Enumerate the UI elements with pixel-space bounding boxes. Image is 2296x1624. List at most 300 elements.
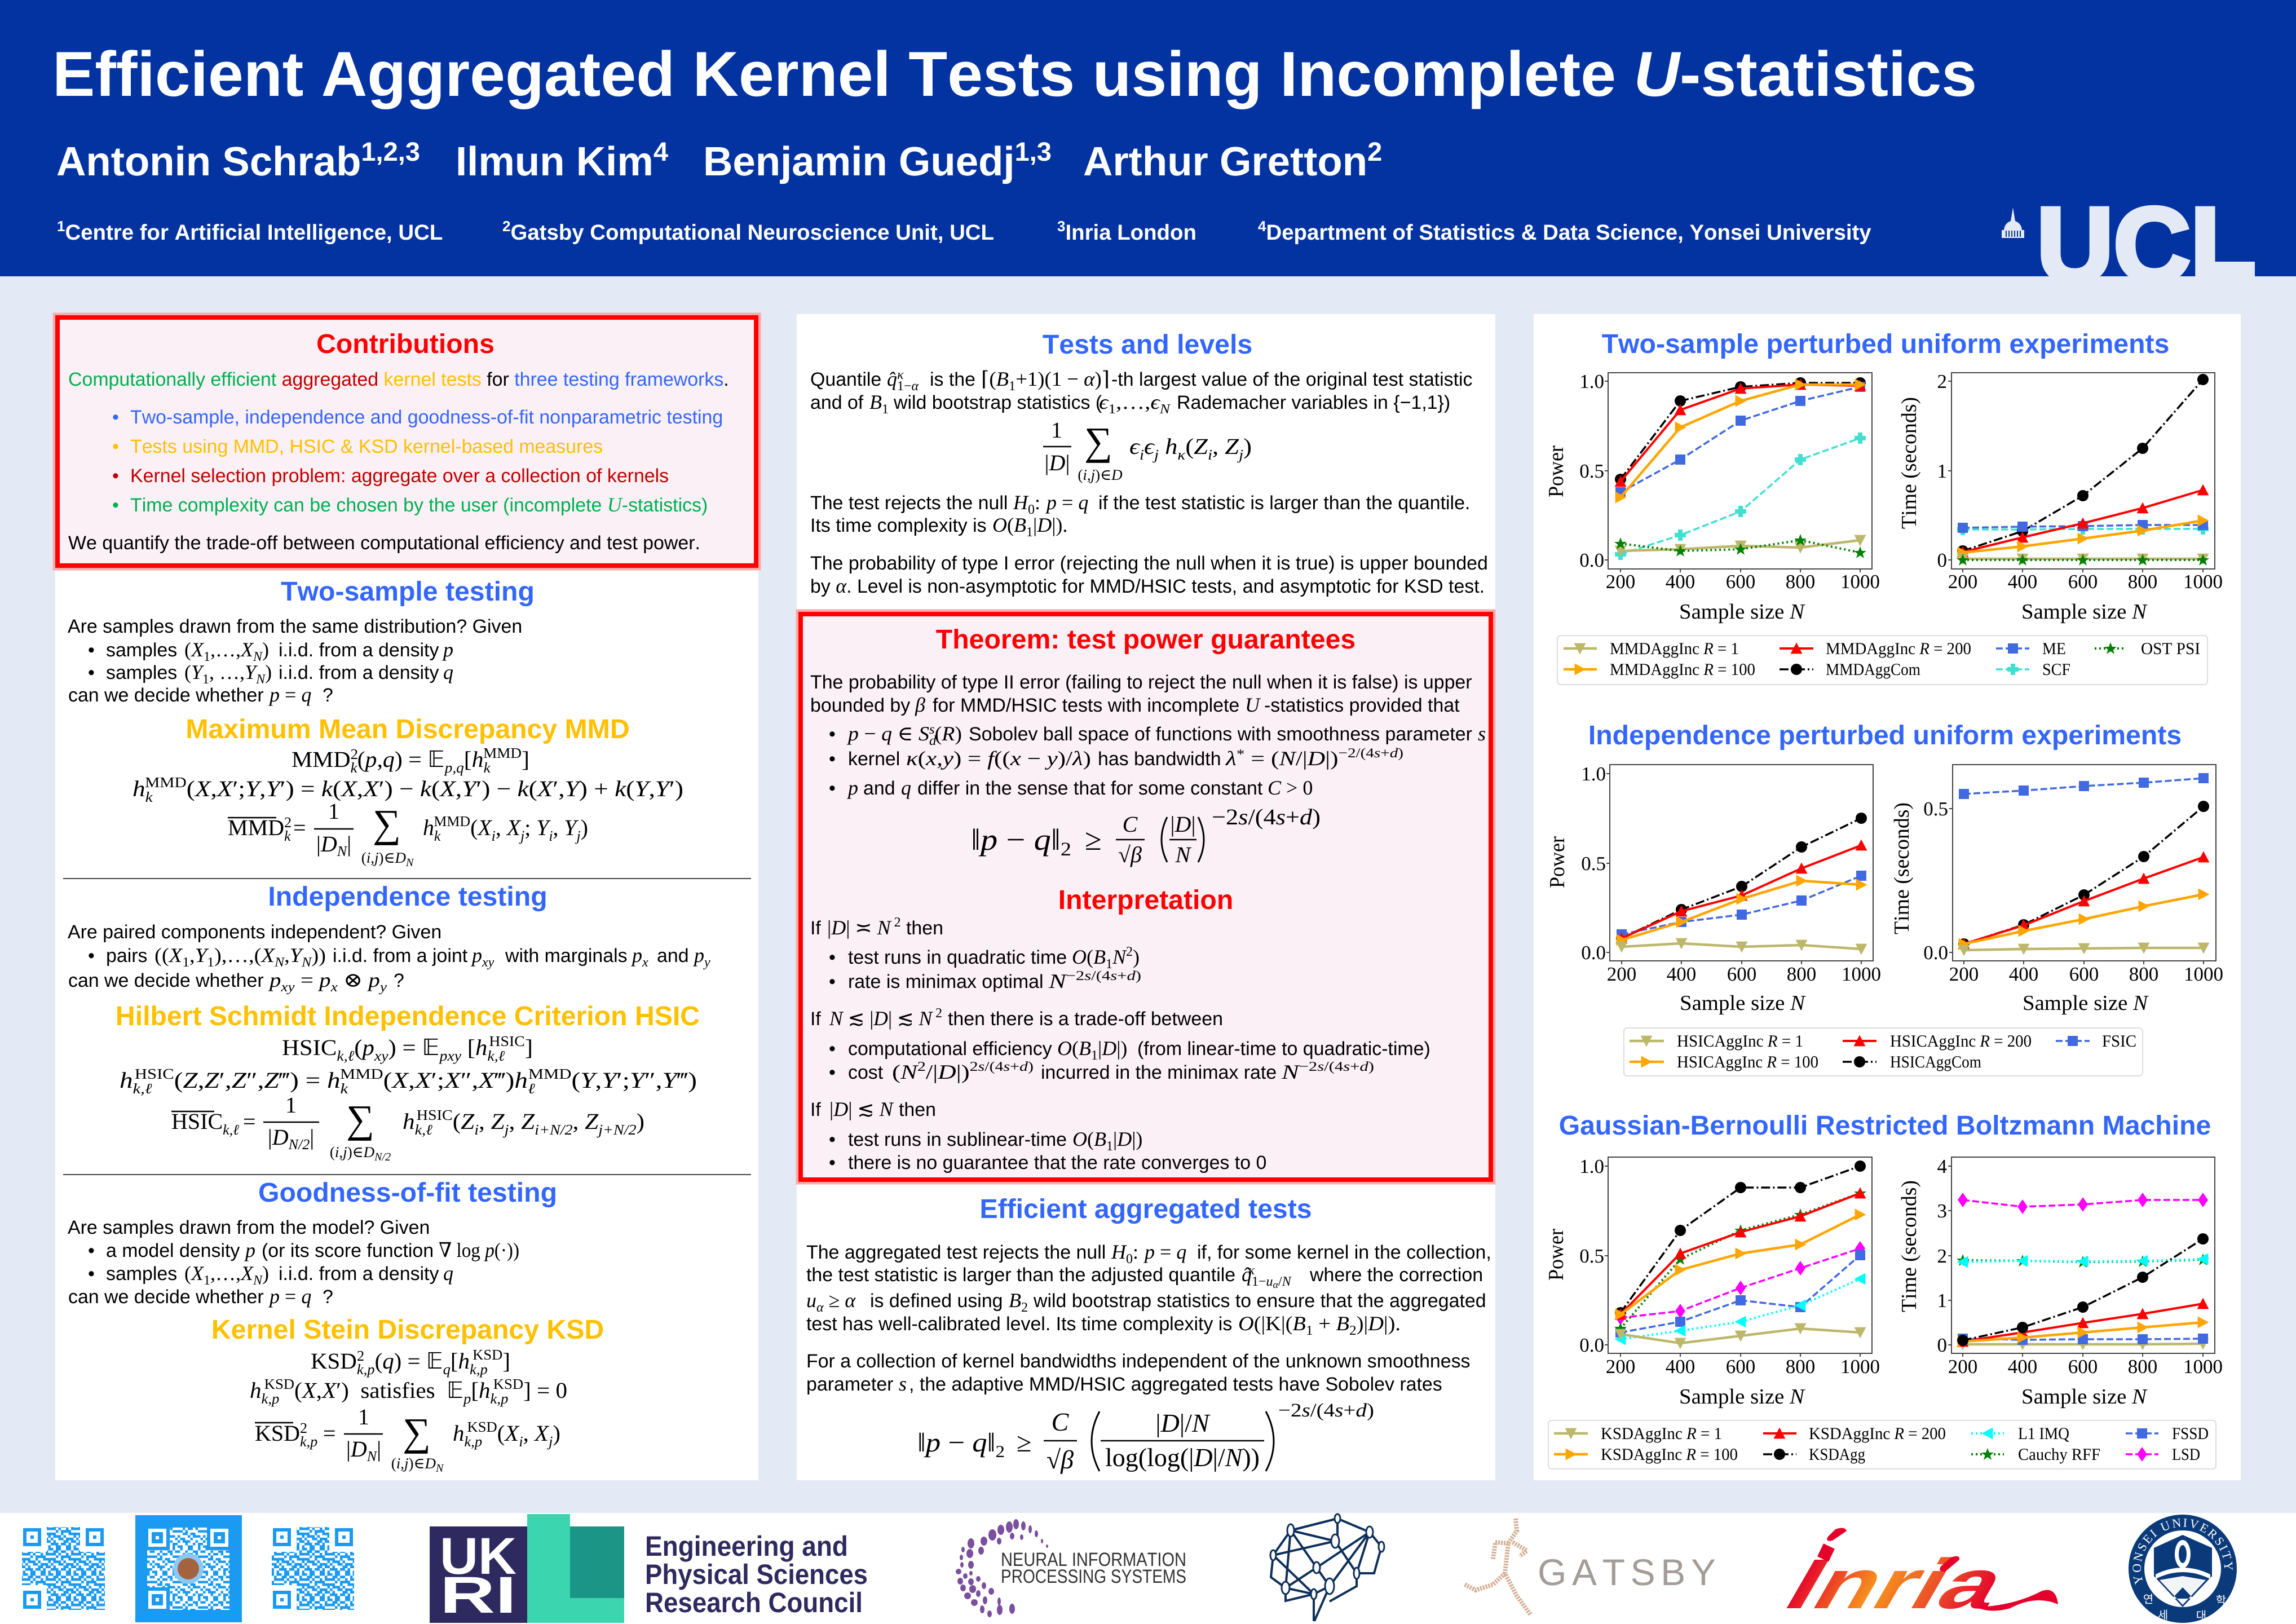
equations: KSD: N (367, 1448, 378, 1464)
legend: RBM: Cauchy RFF (2018, 1445, 2100, 1464)
equations: KSD: h (458, 1348, 470, 1374)
interpretation: trade-off case: 2 (917, 1060, 926, 1074)
equation: wild bootstrap (1043, 417, 1252, 483)
chart: RBM power: 200 (1606, 1356, 1635, 1378)
equation: wild bootstrap: j (1153, 447, 1159, 463)
sobolev rates text: s (899, 1373, 907, 1395)
interpretation: trade-off case: O(B (1057, 1037, 1091, 1060)
chart: RBM time (1897, 1155, 2223, 1409)
interpretation: sublinear case: O(B (1072, 1128, 1106, 1150)
theorem text: R) (942, 722, 961, 745)
equations: MMD: 1 (328, 798, 339, 824)
theorem text: ( (935, 722, 942, 745)
logo: brain network (1270, 1514, 1384, 1621)
heading: independence testing: Independence testing (268, 881, 547, 912)
panel: middle column (797, 314, 1495, 1480)
chart: RBM time: 200 (1948, 1356, 1977, 1378)
interpretation: quadratic case: |D| ≍ N (827, 916, 891, 939)
equations: HSIC: ( (174, 1067, 183, 1093)
two-sample text: , …, (209, 661, 245, 683)
legend: independence: HSICAggInc R = 100 (1677, 1053, 1818, 1071)
legend: two-sample (1557, 636, 2207, 685)
independence text: i.i.d. from a joint (333, 945, 468, 967)
heading: two-sample testing: Two-sample testing (281, 576, 535, 607)
equations: KSD: k,p (470, 1361, 488, 1378)
logo: Inria: Inria (1771, 1545, 2024, 1623)
logo: Yonsei University: 연 (2143, 1590, 2153, 1607)
legend: two-sample: SCF (2042, 660, 2070, 679)
equations: MMD: N (337, 843, 348, 859)
legend: two-sample: MMDAggCom (1826, 660, 1920, 679)
equation: wild bootstrap: 1 (1051, 417, 1062, 443)
interpretation: quadratic case: rate is minimax optimal (848, 971, 1044, 992)
footer (0, 1513, 2296, 1624)
chart: independence time (1890, 765, 2223, 1015)
chart: independence time: 0.5 (1923, 798, 1948, 820)
section: goodness-of-fit testing (68, 1177, 604, 1475)
aggregated test text: p = q (1143, 1241, 1186, 1263)
equations: MMD: ; (524, 815, 536, 840)
aggregated test text: ≥ (824, 1289, 845, 1312)
authors: Benjamin Guedj (703, 139, 1015, 184)
interpretation: quadratic case: s/(4 s+d) (1084, 969, 1140, 983)
contributions bullets: Two-sample, independence and goodness-of-fit nonparametric testing (130, 407, 723, 428)
independence text: pairs (106, 945, 147, 967)
equations: KSD: p (462, 1391, 471, 1407)
independence text: Are paired components independent? Given (68, 921, 441, 943)
goodness-of-fit text: p (244, 1239, 255, 1261)
logo: Gatsby: GATSBY (1538, 1551, 1716, 1593)
interpretation: trade-off case: then there is a trade-off between (948, 1008, 1223, 1030)
independence text: p (319, 969, 329, 991)
legend: RBM: L1 IMQ (2018, 1424, 2069, 1443)
equations: KSD: X (505, 1420, 519, 1446)
chart: independence time: 0.0 (1923, 942, 1948, 964)
independence text (68, 921, 710, 995)
equations: MMD: k (284, 828, 291, 844)
aggregated test text: / (1278, 1274, 1282, 1289)
equations: KSD: |D (346, 1436, 367, 1462)
goodness-of-fit text: Are samples drawn from the model? Given (68, 1217, 430, 1238)
chart: two-sample time: 200 (1948, 571, 1977, 593)
interpretation: sublinear case: D|) (1117, 1128, 1142, 1150)
two-sample text: N (253, 650, 263, 664)
independence text: and (657, 945, 689, 967)
heading: tests and levels: Tests and levels (1043, 329, 1252, 360)
QR code 2 with portrait (135, 1515, 242, 1622)
interpretation: quadratic case (810, 915, 1141, 992)
chart: RBM time: 0 (1937, 1334, 1947, 1356)
independence text: 1 (182, 955, 189, 970)
equation: sobolev rate: 2 (996, 1442, 1005, 1461)
equation: wild bootstrap: (i,j)∈D (1078, 466, 1123, 483)
legend: RBM: KSDAgg (1809, 1445, 1865, 1464)
chart: two-sample time: 0 (1937, 549, 1947, 571)
goodness-of-fit text (68, 1217, 519, 1308)
chart: two-sample power: 0.0 (1579, 549, 1604, 571)
chart: independence time: 600 (2069, 963, 2099, 985)
equations: HSIC: MMD (528, 1066, 572, 1082)
authors (56, 136, 1382, 184)
heading: two-sample experiments: Two-sample perturbed uniform experiments (1602, 329, 2169, 359)
equations: MMD: j (519, 828, 524, 844)
equations: HSIC: ∑ (346, 1098, 374, 1141)
equations: KSD: ] = 0 (523, 1378, 567, 1403)
equations: KSD: ∑ (403, 1411, 431, 1454)
section: independence testing (68, 881, 710, 1163)
heading: theorem: Theorem: test power guarantees (936, 624, 1355, 655)
quantile text: 1− (897, 379, 912, 394)
contributions bullets: • (112, 495, 119, 516)
heading: independence experiments: Independence perturbed uniform experiments (1588, 720, 2182, 751)
aggregated test text: The aggregated test rejects the null (806, 1242, 1106, 1263)
equations: MMD: i (492, 828, 496, 844)
equations: MMD: i (549, 828, 553, 844)
sobolev rates text: , the adaptive MMD/HSIC aggregated tests have Sobolev rates (909, 1374, 1442, 1395)
goodness-of-fit text: can we decide whether (68, 1286, 264, 1308)
independence text: ⊗ (338, 969, 368, 991)
interpretation: trade-off case: • (829, 1038, 836, 1060)
equations: KSD: N (435, 1462, 444, 1475)
equations: KSD: 2 (300, 1420, 307, 1436)
two-sample text: ) (262, 638, 269, 661)
theorem text: p (846, 776, 858, 799)
equation: power guarantee: 2 (1061, 839, 1071, 860)
independence text: X (261, 944, 273, 967)
independence text: 1 (207, 955, 214, 970)
equation: sobolev rate: ‖p − q‖ (917, 1428, 995, 1458)
theorem text: Sobolev ball space of functions with smoothness parameter (969, 723, 1472, 745)
equations: HSIC: Z (461, 1109, 473, 1134)
equations: HSIC: , (479, 1109, 491, 1134)
equations: HSIC: h (120, 1067, 131, 1093)
aggregated test text: 2 (1349, 1323, 1357, 1338)
equations: KSD: ] (502, 1348, 510, 1374)
sobolev rates text: parameter (806, 1374, 893, 1395)
chart: independence time: Time (seconds) (1890, 802, 1914, 934)
quantile text: -th largest value of the original test statistic (1111, 369, 1473, 390)
aggregated test text (806, 1241, 1491, 1338)
heading: RBM experiments: Gaussian-Bernoulli Restricted Boltzmann Machine (1559, 1110, 2211, 1141)
two-sample text: ? (323, 685, 333, 706)
equations: HSIC: ] (525, 1035, 533, 1060)
independence text: y (703, 955, 710, 970)
equations: HSIC: k,ℓ (133, 1080, 152, 1097)
two-sample text: Are samples drawn from the same distribution? Given (68, 616, 522, 637)
quantile text: is the (930, 369, 975, 390)
equations: HSIC: ) = (388, 1035, 422, 1060)
interpretation: trade-off case: 2 (970, 1060, 978, 1074)
aggregated test text: )| (1357, 1312, 1368, 1335)
legend: independence: FSIC (2102, 1032, 2136, 1051)
interpretation: trade-off case: | (1098, 1037, 1102, 1060)
equation: wild bootstrap: ) (1243, 434, 1252, 459)
panel: right column experiments (1534, 314, 2241, 1480)
logo: NeurIPS: NEURAL INFORMATION (1001, 1549, 1186, 1570)
equations: KSD: = (323, 1420, 336, 1446)
theorem text: has bandwidth (1098, 748, 1221, 770)
equations: MMD: ] (522, 747, 529, 772)
chart: RBM time: 1000 (2183, 1356, 2223, 1378)
authors: 4 (654, 136, 668, 166)
section: two-sample testing (68, 576, 683, 869)
goodness-of-fit text: ∇ log p(·)) (439, 1239, 519, 1261)
theorem text: −2/(4 (1339, 746, 1374, 761)
independence text: can we decide whether (68, 970, 264, 991)
equations: KSD: ) (553, 1420, 560, 1446)
goodness-of-fit text: ,…, (210, 1262, 241, 1285)
equations: MMD: [ (464, 747, 472, 772)
equation: power guarantee: −2s/(4s+d) (1212, 804, 1321, 829)
equations: KSD: X,X′) satisfies 𝔼 (302, 1378, 463, 1404)
equations: MMD: ( (470, 815, 478, 840)
logo: NeurIPS (956, 1519, 1186, 1617)
legend: independence: HSICAggInc R = 200 (1890, 1032, 2032, 1051)
goodness-of-fit text: 1 (204, 1273, 210, 1288)
header banner (0, 0, 2296, 304)
quantile text: wild bootstrap statistics ( (893, 392, 1102, 413)
authors: Antonin Schrab (56, 139, 361, 184)
aggregated test text: + (1313, 1312, 1336, 1335)
equations: HSIC: [ (461, 1035, 475, 1060)
equations: MMD: MMD (292, 747, 351, 772)
equations: HSIC: N/2 (374, 1151, 391, 1163)
interpretation: sublinear case: If (810, 1099, 821, 1120)
chart: independence power: Sample size N (1680, 991, 1807, 1015)
equations: KSD: | (377, 1436, 381, 1462)
equations: KSD: ( (497, 1420, 505, 1446)
interpretation: trade-off case: incurred in the minimax rate (1041, 1062, 1277, 1083)
equations: HSIC: (i,j)∈D (330, 1144, 374, 1160)
chart: independence time: 400 (2009, 963, 2038, 985)
chart: independence power: 200 (1607, 963, 1636, 985)
chart: two-sample power: Power (1544, 445, 1568, 497)
aggregated test text: N (1282, 1274, 1292, 1289)
two-sample text: • (88, 662, 95, 683)
theorem text: The probability of type II error (failing to reject the null when it is false) is upper (810, 672, 1472, 693)
equations: HSIC: HSIC (282, 1035, 337, 1060)
equations: HSIC: p (363, 1035, 374, 1060)
sobolev rates text (806, 1351, 1471, 1395)
logo: UCL (2002, 205, 2255, 276)
equations: MMD: MMD (483, 745, 522, 761)
independence text: with marginals (505, 945, 628, 967)
chart: independence power: 600 (1727, 963, 1756, 985)
theorem text: d (929, 734, 937, 748)
chart: two-sample time: 600 (2068, 571, 2098, 593)
quantile text: and of (810, 392, 864, 413)
independence text: = (295, 969, 319, 991)
equations: HSIC: i+N/2 (535, 1122, 573, 1138)
theorem text: q (901, 776, 911, 799)
legend: RBM: LSD (2172, 1445, 2200, 1464)
aggregated test text: α (845, 1289, 855, 1312)
quantile text: α (912, 379, 919, 394)
independence text: y (379, 980, 387, 995)
goodness-of-fit text: ) (262, 1262, 269, 1285)
equation: power guarantee (971, 804, 1321, 867)
equations: HSIC: ( (383, 1067, 392, 1093)
goodness-of-fit text: ? (323, 1286, 333, 1308)
interpretation: quadratic case: O(B (1072, 946, 1106, 968)
equation: wild bootstrap: Z (1194, 434, 1206, 459)
equations: KSD: h (479, 1378, 490, 1403)
equation: power guarantee: |D| (1171, 811, 1195, 837)
equation: wild bootstrap: j (1237, 447, 1243, 463)
chart: RBM power: 1.0 (1579, 1155, 1604, 1177)
equations: MMD: (i,j)∈D (361, 849, 406, 866)
equations: HSIC: 1 (285, 1092, 297, 1118)
QR code 3 (272, 1527, 354, 1610)
interpretation: trade-off case: • (829, 1062, 836, 1083)
equations: MMD: 2 (284, 814, 292, 831)
theorem text: s (1478, 722, 1486, 745)
rejection text: The test rejects the null (810, 492, 1008, 514)
theorem text: λ (1226, 747, 1235, 770)
legend: two-sample: MMDAggInc R = 200 (1826, 639, 1971, 658)
aggregated test text: D|). (1368, 1312, 1399, 1335)
equations: KSD: , (523, 1420, 535, 1446)
chart: independence power: 1000 (1842, 963, 1881, 985)
interpretation: trade-off case: s/(4 s+d) (978, 1060, 1032, 1074)
theorem text: bounded by (810, 695, 910, 716)
aggregated test text: H (1111, 1241, 1126, 1263)
quantile text: N (1159, 402, 1171, 417)
heading: KSD: Kernel Stein Discrepancy KSD (211, 1314, 604, 1345)
chart: independence power: Power (1546, 836, 1569, 888)
chart: RBM power: 600 (1726, 1356, 1755, 1378)
heading: interpretation: Interpretation (1058, 885, 1233, 915)
legend: two-sample: ME (2042, 639, 2066, 658)
equations: MMD: = (293, 815, 306, 840)
interpretation: trade-off case: D|) (1102, 1037, 1127, 1060)
section: tests and levels (810, 329, 1488, 597)
equations: HSIC: Z (521, 1109, 533, 1134)
logo: UKRI EPSRC: Engineering and (645, 1530, 848, 1562)
two-sample text: ) (265, 661, 272, 683)
quantile text: κ (897, 368, 904, 382)
authors: 1,3 (1015, 136, 1052, 166)
goodness-of-fit text: a model density (106, 1240, 240, 1261)
chart: RBM time: Sample size N (2021, 1385, 2148, 1409)
type I error text (810, 553, 1488, 597)
equations: KSD: q (443, 1361, 451, 1378)
independence text: ((X (154, 944, 182, 967)
logo: Gatsby (1465, 1519, 1716, 1614)
equations: MMD: h (423, 815, 434, 840)
independence text: p (472, 944, 482, 967)
aggregated test text: u (806, 1289, 816, 1312)
two-sample text: p = q (268, 683, 311, 706)
two-sample text: (Y (184, 661, 202, 683)
equations: MMD: , (496, 815, 507, 840)
equations: KSD: [ (451, 1348, 458, 1374)
section: efficient aggregated tests (806, 1194, 1491, 1474)
aggregated test text: is defined using (870, 1290, 1003, 1312)
equation: wild bootstrap: , (1212, 434, 1225, 459)
equation: wild bootstrap: i (1208, 447, 1212, 463)
affiliations: Inria London (1065, 220, 1196, 245)
independence text: , (189, 944, 195, 967)
independence text: Y (195, 944, 206, 967)
equations: HSIC: MMD (340, 1066, 383, 1082)
chart: two-sample power: 800 (1786, 571, 1815, 593)
equations: HSIC: k (341, 1080, 348, 1097)
goodness-of-fit text: X (241, 1262, 253, 1285)
legend: two-sample: MMDAggInc R = 100 (1610, 660, 1755, 679)
equations: KSD: k,p (491, 1391, 508, 1407)
theorem text: • (829, 748, 836, 770)
equations: MMD: , (553, 815, 564, 840)
logo: UKRI EPSRC: RI (440, 1566, 516, 1624)
two-sample text: Y (245, 661, 256, 683)
two-sample text: (X (184, 638, 204, 661)
interpretation: trade-off case: 2 (932, 1006, 942, 1021)
legend: RBM (1548, 1420, 2216, 1469)
equations: KSD (250, 1347, 567, 1475)
equations: KSD: KSD (493, 1376, 523, 1392)
independence text: x (330, 980, 338, 995)
chart: two-sample power: 200 (1606, 571, 1635, 593)
goodness-of-fit text: • (88, 1240, 95, 1261)
quantile text: α)⌉ (1084, 368, 1109, 390)
chart: two-sample power: 0.5 (1579, 460, 1604, 482)
equations: HSIC: k,ℓ (415, 1122, 432, 1138)
aggregated test text: α (816, 1300, 824, 1315)
chart: RBM power: 1000 (1840, 1356, 1880, 1378)
equations: HSIC: HSIC (171, 1109, 223, 1134)
type I error text: by α. Level is non-asymptotic for MMD/HSIC tests, and asymptotic for KSD test. (810, 575, 1485, 597)
rejection text: O(B (992, 514, 1026, 536)
goodness-of-fit text: i.i.d. from a density (279, 1263, 439, 1285)
equations: HSIC: ( (572, 1067, 580, 1093)
equation: sobolev rate: log(log(|D|/N)) (1105, 1443, 1260, 1472)
equations: KSD: KSD (473, 1347, 502, 1363)
goodness-of-fit text: q (443, 1262, 453, 1285)
equations: HSIC: ( (354, 1035, 363, 1060)
equation: power guarantee: ‖p − q‖ (971, 823, 1059, 857)
equations: KSD: X (535, 1420, 548, 1446)
interpretation: quadratic case: If (810, 917, 821, 939)
chart: two-sample time: 1 (1937, 460, 1947, 482)
interpretation: sublinear case: test runs in sublinear-time (848, 1129, 1067, 1150)
rejection text: 0 (1028, 502, 1035, 517)
equations: KSD: h (250, 1378, 261, 1403)
interpretation: quadratic case: then (906, 917, 943, 939)
theorem text: = ( (1245, 747, 1279, 770)
interpretation: sublinear case: | (1113, 1128, 1117, 1150)
aggregated test text: O(|K|(B (1238, 1312, 1305, 1335)
independence text: p (694, 944, 704, 967)
chart: two-sample time: 2 (1937, 370, 1947, 392)
independence text: p (270, 969, 280, 991)
aggregated test text: 1 (1306, 1323, 1313, 1338)
chart: independence time: 200 (1949, 963, 1979, 985)
rejection text: : (1035, 491, 1040, 514)
contributions bullets: Time complexity can be chosen by the user (incomplete U-statistics) (130, 493, 708, 516)
equation: wild bootstrap: |D| (1045, 450, 1070, 475)
quantile text: 1 (882, 402, 889, 417)
equations: HSIC: pxy (438, 1048, 462, 1064)
equations: HSIC: ℓ (528, 1080, 535, 1097)
theorem text: kernel (848, 748, 900, 770)
two-sample text: samples (106, 639, 177, 661)
independence text: , (284, 944, 290, 967)
goodness-of-fit text: • (88, 1263, 95, 1285)
two-sample text: i.i.d. from a density (279, 639, 439, 661)
interpretation: quadratic case: ) (1133, 946, 1140, 968)
equations: KSD: 2 (357, 1348, 364, 1364)
